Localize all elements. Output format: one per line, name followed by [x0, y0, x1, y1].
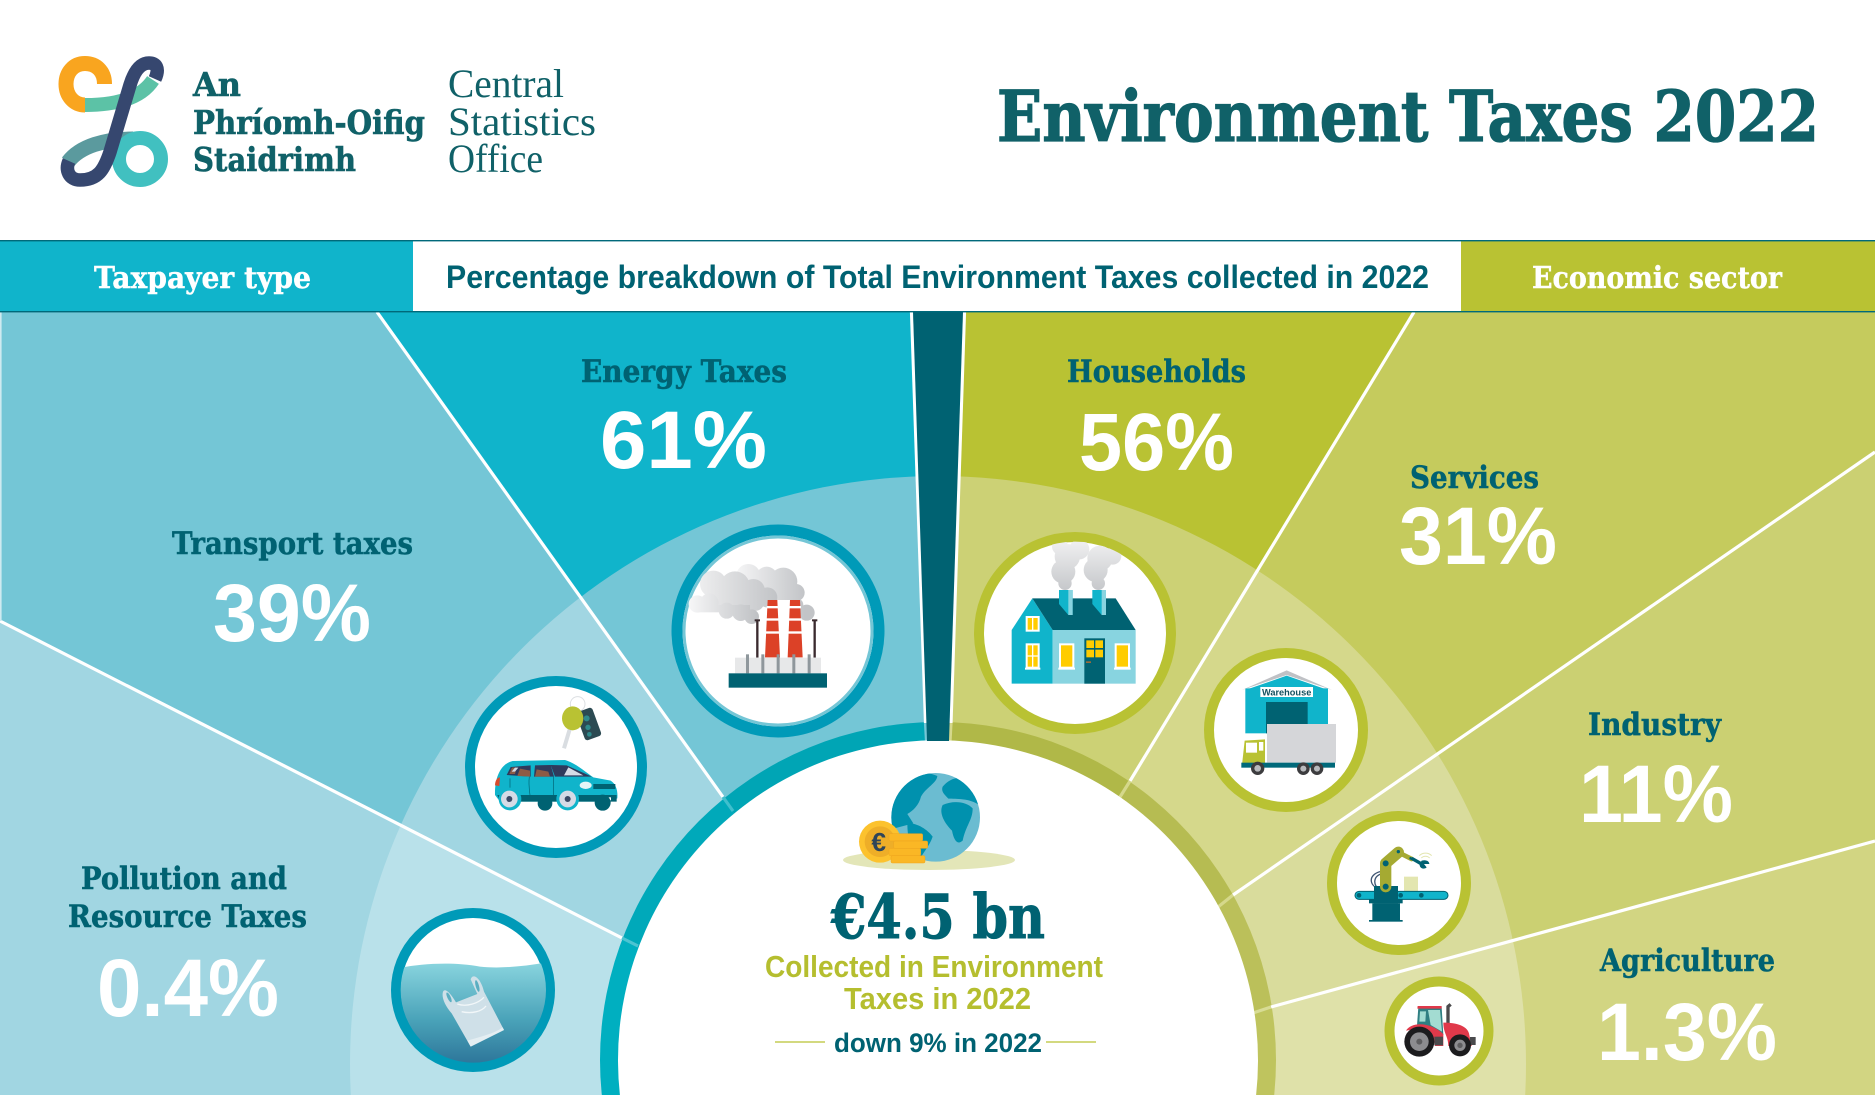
band: taxpayer type: Taxpayer type: [94, 261, 311, 296]
label: pollution and resource taxes: 0.4%: [97, 943, 279, 1034]
central total: €4.5 bn: [830, 882, 1045, 953]
label: pollution and resource taxes: Resource Taxes: [68, 899, 307, 935]
logo English name: Statistics: [448, 99, 596, 144]
central change note: down 9% in 2022: [834, 1028, 1042, 1058]
central caption: Taxes in 2022: [844, 981, 1031, 1016]
header band: [0, 240, 1875, 312]
label: industry: [1579, 707, 1733, 840]
band: economic sector: Economic sector: [1532, 261, 1783, 296]
label: agriculture: Agriculture: [1599, 943, 1775, 979]
label: households: 56%: [1079, 397, 1234, 488]
icon: house: [979, 537, 1171, 729]
label: energy taxes: Energy Taxes: [581, 354, 787, 390]
logo Irish name: Staidrimh: [193, 140, 356, 179]
band: taxpayer type: [0, 241, 413, 311]
icon: tractor: [1390, 982, 1488, 1080]
label: services: 31%: [1399, 491, 1557, 582]
label: energy taxes: [581, 354, 787, 486]
label: transport taxes: Transport taxes: [172, 526, 413, 562]
label: services: Services: [1410, 460, 1539, 496]
band: subtitle: Percentage breakdown of Total Environment Taxes collected in 2022: [446, 259, 1429, 295]
label: pollution and resource taxes: Pollution and: [81, 861, 287, 897]
label: industry: 11%: [1579, 749, 1733, 840]
central caption: Collected in Environment: [765, 949, 1103, 984]
label: households: [1067, 354, 1246, 488]
label: transport taxes: [172, 526, 413, 659]
label: pollution and resource taxes: [68, 861, 307, 1034]
background sectors, middle semicircle: [350, 476, 1526, 1095]
icon: power plant: [677, 530, 879, 732]
icon: globe and coins: [843, 772, 1015, 870]
icon: car and keys: [470, 681, 642, 853]
background sectors, outer band: [0, 312, 1875, 1095]
label: energy taxes: 61%: [600, 395, 767, 486]
logo English name: Central: [448, 61, 564, 106]
label: industry: Industry: [1588, 707, 1722, 743]
icon: robot arm and conveyor: [1332, 816, 1466, 950]
label: agriculture: [1597, 943, 1777, 1078]
band: economic sector: [1461, 241, 1875, 311]
header background: [0, 0, 1875, 240]
icon: warehouse and truck: Warehouse: [1262, 687, 1311, 697]
label: households: Households: [1067, 354, 1246, 390]
logo mark: [66, 63, 161, 180]
label: agriculture: 1.3%: [1597, 987, 1777, 1078]
icon: warehouse and truck: [1209, 653, 1363, 807]
central white semicircle: [618, 740, 1258, 1095]
label: transport taxes: 39%: [213, 568, 371, 659]
logo Irish name: Phríomh-Oifig: [193, 103, 425, 142]
central caption: [765, 949, 1103, 1016]
icon: globe and coins: €: [871, 827, 886, 857]
logo English name: Office: [448, 136, 543, 181]
inner ring sectors: [600, 722, 1276, 1095]
icon: plastic bag in water: [396, 913, 550, 1067]
central dark wedge: [913, 312, 963, 741]
logo Irish name: An: [192, 65, 241, 104]
sector divider lines: [0, 312, 1875, 1013]
logo English name: [448, 61, 596, 181]
logo Irish name: [192, 65, 425, 179]
